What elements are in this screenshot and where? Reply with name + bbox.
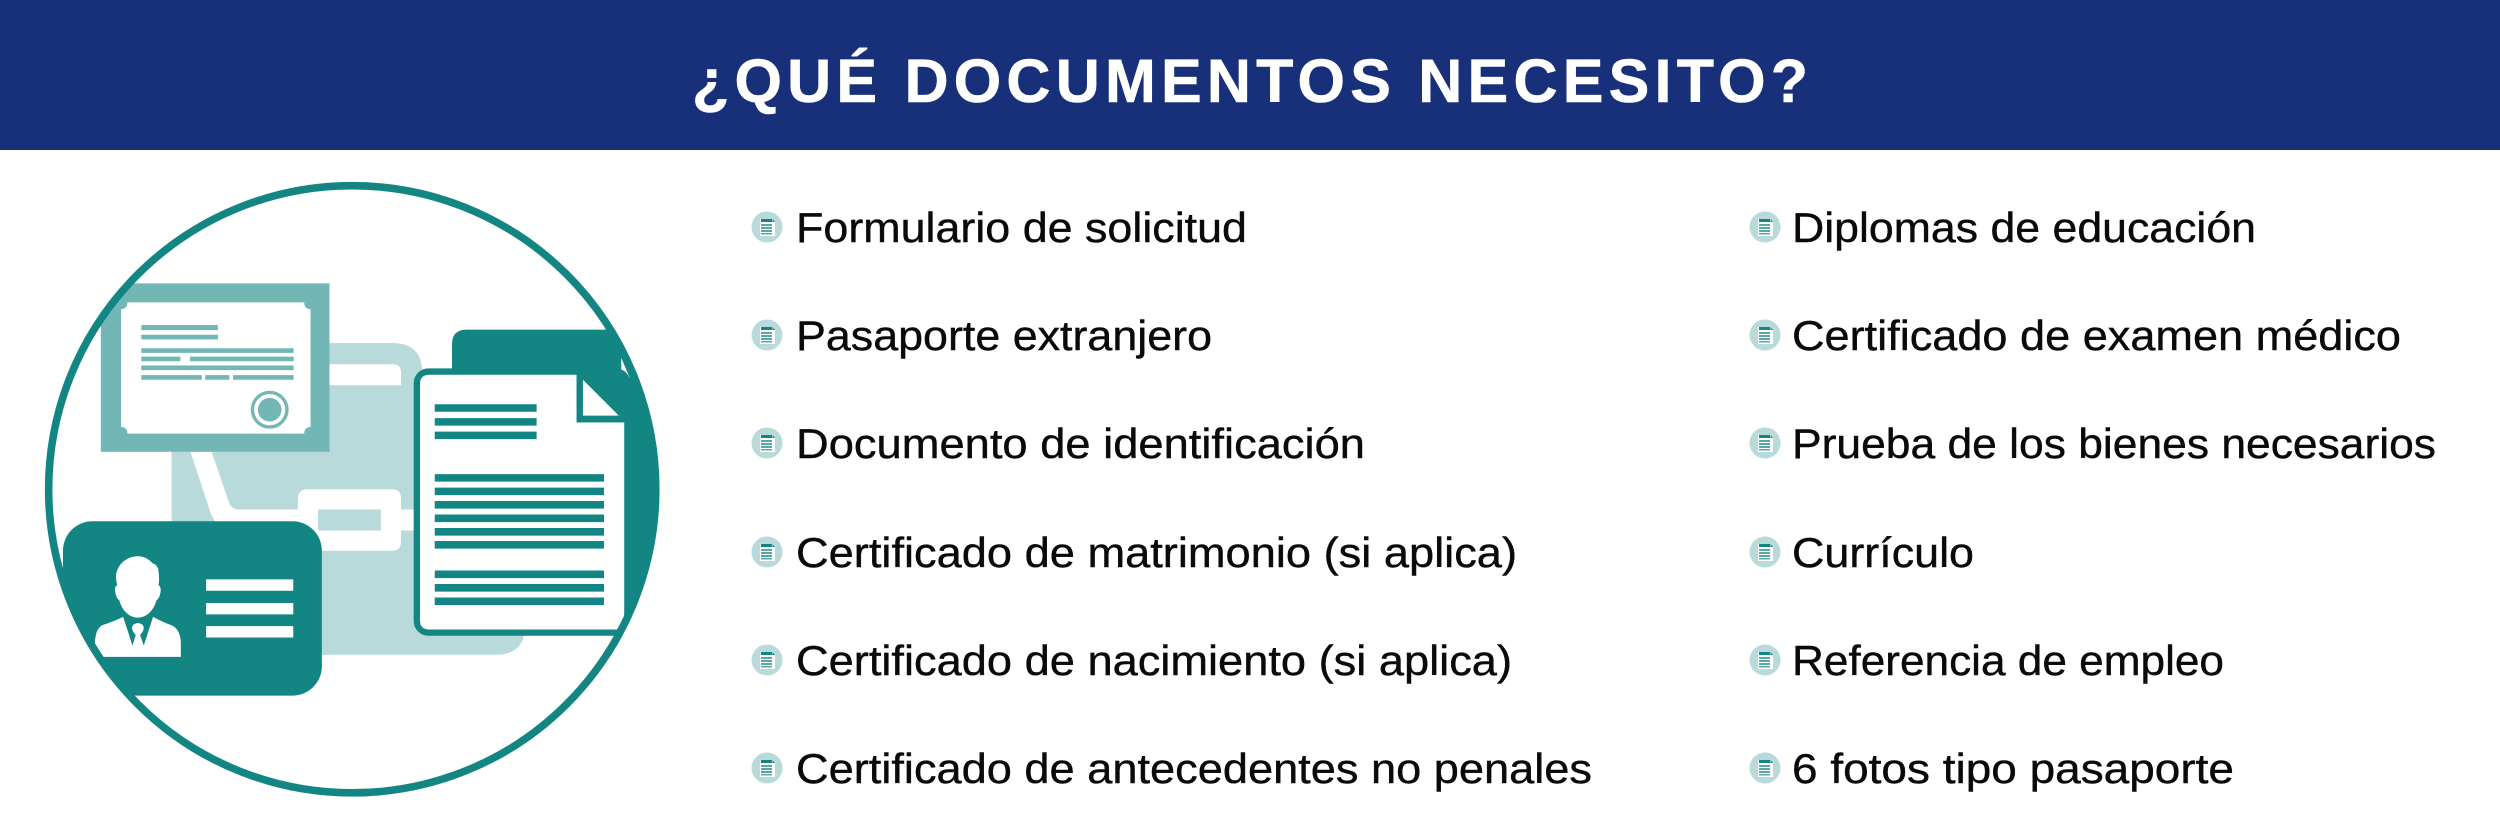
list item: Certificado de matrimonio: Certificado de matrimonio (si aplica) [796,529,1517,576]
list item: 6 fotos tipo pasaporte: 6 fotos tipo pasaporte [1792,745,2234,792]
list item: Certificado de nacimiento: Certificado de nacimiento (si aplica) [796,637,1512,684]
list item: Pasaporte extranjero: Pasaporte extranjero [796,312,1212,359]
title: ¿QUÉ DOCUMENTOS NECESITO? [692,47,1808,115]
list item: Formulario de solicitud: Formulario de solicitud [796,204,1247,251]
briefcase [172,343,525,655]
list item: Documento de identificación: Documento de identificación [796,420,1365,467]
list item: Prueba de los bienes necesarios: Prueba de los bienes necesarios [1792,420,2436,467]
certificate [101,283,329,452]
folder and paper document [414,330,652,636]
list item: Diplomas de educación: Diplomas de educación [1792,204,2256,251]
list item: Currículo: Currículo [1792,529,1974,576]
list item: Certificado de antecedentes: Certificado de antecedentes no penales [796,745,1592,792]
header banner [0,0,2500,150]
list item: Referencia de empleo: Referencia de empleo [1792,637,2224,684]
ID card [63,521,322,696]
person silhouette [95,556,181,657]
illustration: documents in circle [49,186,694,793]
list item: Certificado de examen médico: Certificado de examen médico [1792,312,2401,359]
